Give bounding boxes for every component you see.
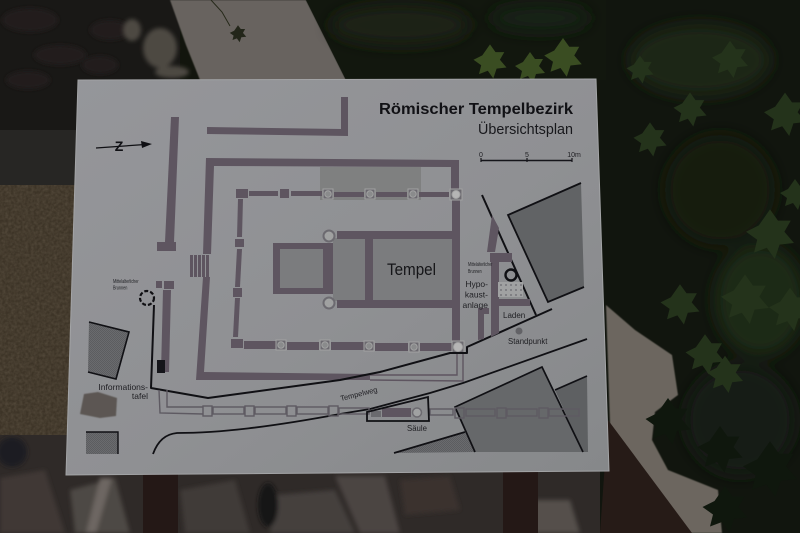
label: Informationstafel: tafel (132, 391, 148, 401)
standpoint dot (516, 328, 522, 334)
dark foliage right (306, 0, 800, 533)
label: Standpunkt: Standpunkt (508, 337, 548, 346)
scale bar (479, 152, 581, 162)
label: Hypokaustanlage: Hypo- (465, 279, 488, 289)
hypocaust walls (478, 215, 530, 340)
vine leaf on wall (211, 0, 246, 42)
label: Säule: Säule (407, 424, 427, 433)
label: Laden: Laden (503, 311, 525, 320)
small site square (86, 432, 118, 454)
temple cella fills (333, 238, 453, 301)
stairs (190, 255, 209, 277)
dashed well circle left (140, 291, 154, 305)
label: Mittelalterlicher Brunnen left: Mittelalterlicher (113, 279, 150, 285)
bottom right site polygons (394, 367, 588, 453)
upper L wall (207, 97, 348, 136)
label: Hypokaustanlage: anlage (462, 300, 488, 310)
thin outer lines (370, 351, 463, 381)
pale wall top centre (170, 0, 346, 80)
label: Hypokaustanlage: kaust- (465, 290, 488, 300)
columns (276, 189, 464, 353)
stone wall top left (0, 0, 189, 135)
inner colonnade (231, 189, 452, 351)
scale bar: 0 (479, 152, 483, 159)
leaves (474, 38, 800, 532)
label: Mittelalterlicher Brunnen right: Brunnen (468, 269, 482, 275)
north arrow: Z (115, 138, 124, 154)
far-left wall (156, 117, 179, 372)
temple altar square (273, 243, 333, 294)
Säule reconstruction box (367, 397, 429, 421)
north arrow (96, 138, 152, 154)
temple columns (324, 230, 334, 308)
label: Tempelweg: Tempelweg (339, 385, 378, 403)
shaded excavation area (320, 167, 421, 200)
gravel strip left (0, 130, 80, 440)
scale bar: 5 (525, 152, 529, 159)
black marker (157, 360, 165, 373)
stain patch (80, 392, 117, 418)
building top right (508, 183, 584, 302)
temple walls (337, 231, 453, 308)
plan drawing (80, 97, 588, 454)
rock rubble bottom (0, 435, 660, 533)
label: Mittelalterlicher Brunnen right: Mittelalterlicher (468, 262, 505, 268)
lower colonnade outline (159, 390, 579, 418)
panel: sign board (66, 79, 609, 475)
well circle right (506, 270, 516, 280)
label: Mittelalterlicher Brunnen left: Brunnen (113, 286, 127, 292)
left site polygon (88, 322, 129, 379)
brown soil lower right (600, 420, 692, 533)
subtitle: Übersichtsplan (478, 120, 573, 138)
outer precinct wall (196, 158, 460, 380)
road outlines (151, 195, 587, 454)
label: Tempel: Tempel (387, 261, 436, 279)
label: Informationstafel: Informations- (98, 382, 148, 392)
pale wall lower right (606, 305, 722, 533)
title: Römischer Tempelbezirk (379, 101, 573, 118)
sign posts (143, 472, 538, 533)
hypocaust floor dots (498, 282, 523, 297)
scale bar: 10m (567, 152, 581, 159)
